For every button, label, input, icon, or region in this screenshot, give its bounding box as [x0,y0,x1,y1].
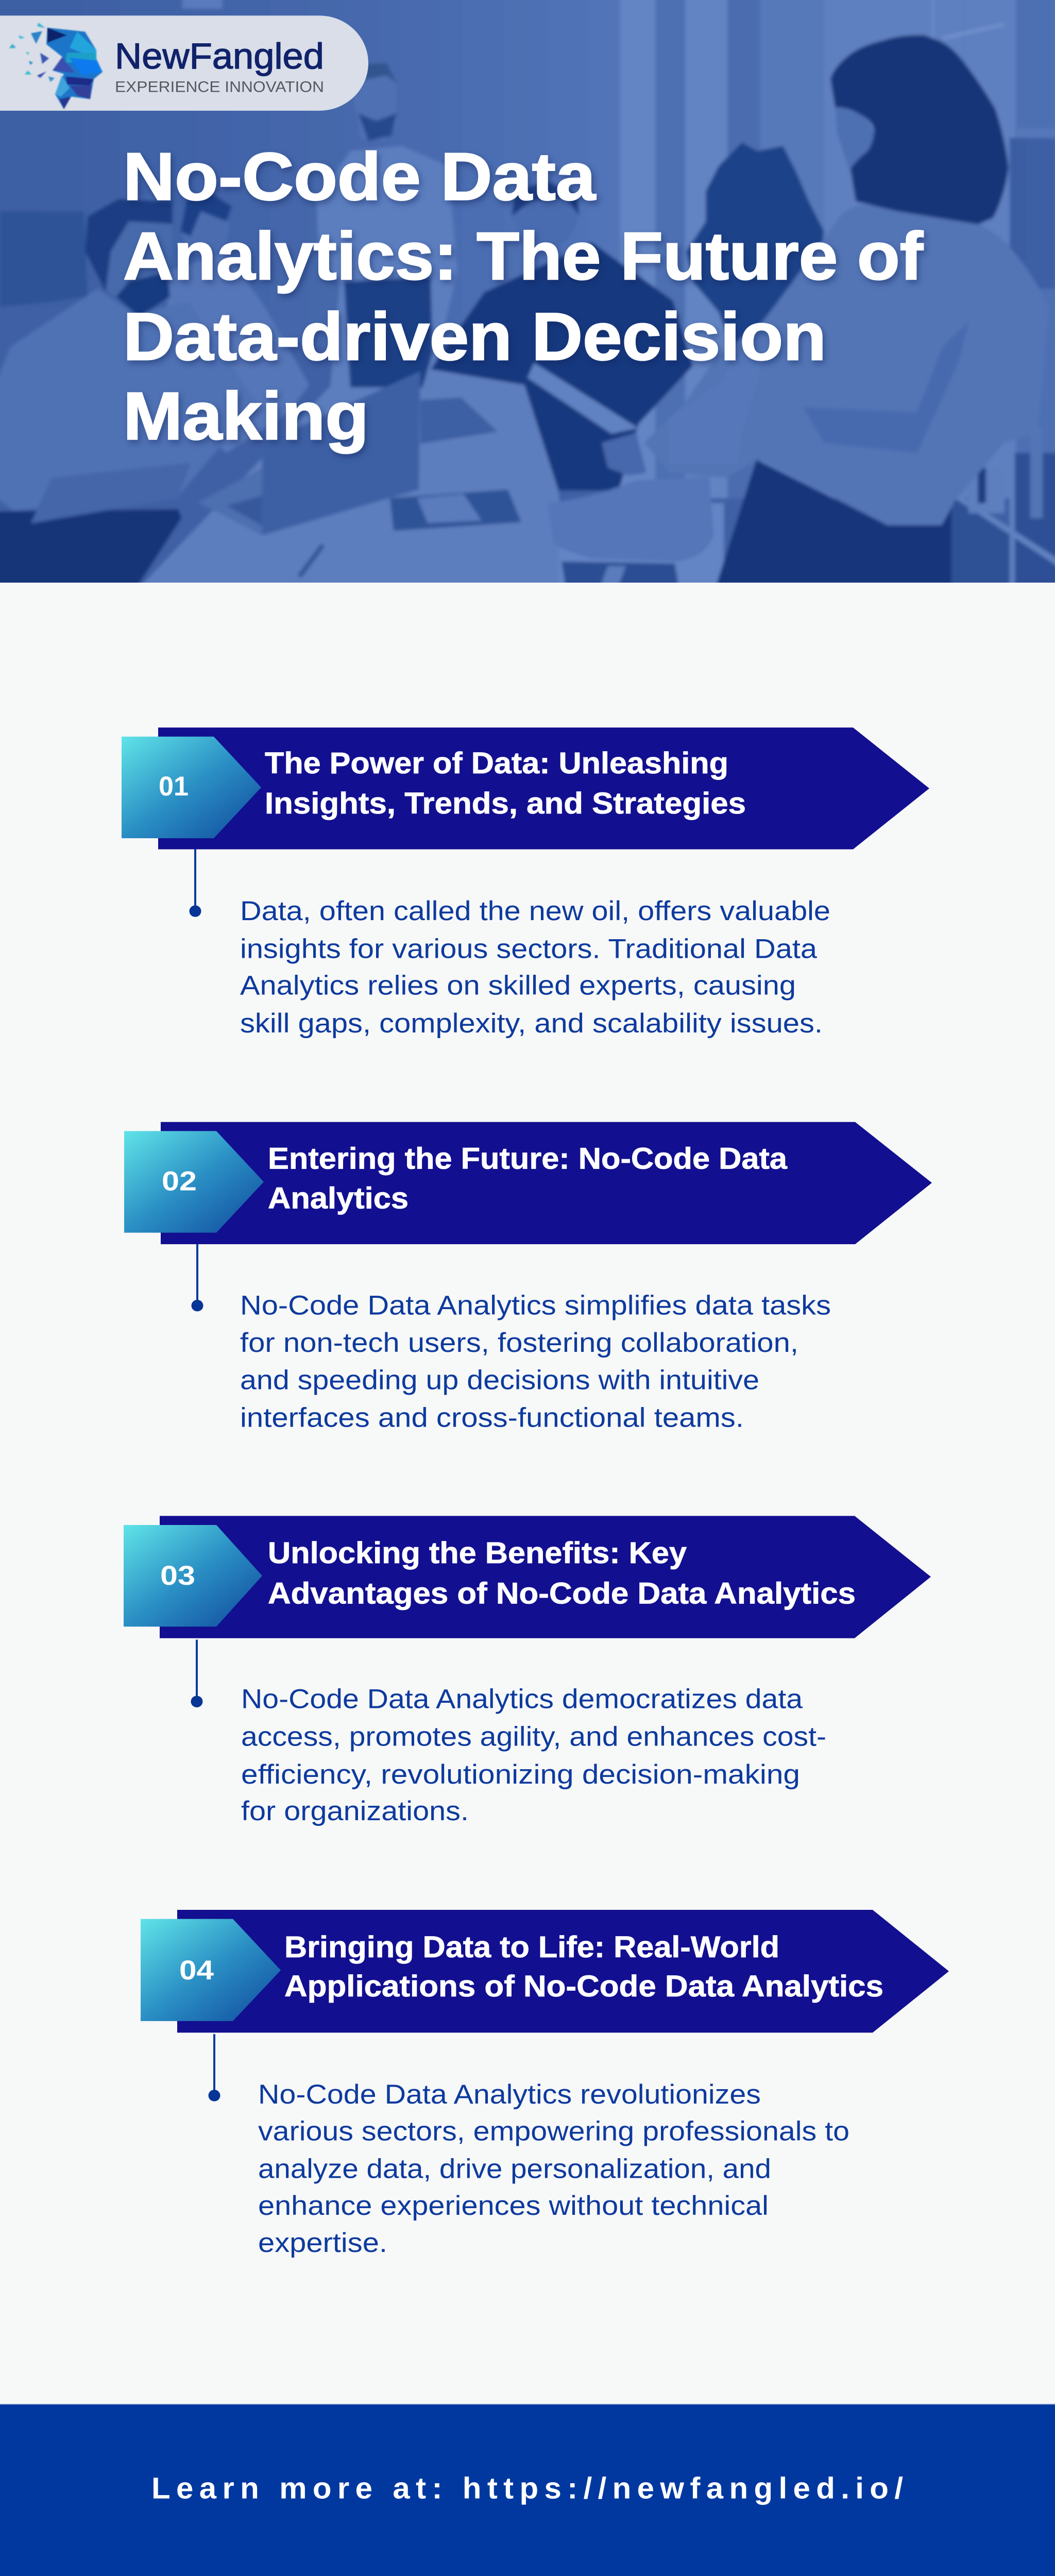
logo wordmark: NewFangled [115,37,324,77]
woman pants [713,460,951,594]
number badge 03 [124,1525,262,1626]
body text 03: No-Code Data Analytics democratizes data [241,1684,803,1714]
body text 02: and speeding up decisions with intuitive [240,1365,759,1395]
heading 04 [284,1929,883,2003]
number 02: 02 [162,1166,197,1196]
shelf [951,496,1055,594]
heading 01 [265,746,746,820]
body text 01: insights for various sectors. Traditional Data [240,934,817,964]
logo pill background [0,15,368,111]
connector 03 [191,1640,203,1707]
laptop [262,371,420,535]
number badge 01 [122,737,261,838]
banner arrow 01 [158,727,929,849]
body text 03 [241,1684,826,1826]
woman behind [165,251,309,453]
body text 02: No-Code Data Analytics simplifies data tasks [240,1291,831,1321]
banner arrow 04 [177,1910,949,2032]
number 03: 03 [160,1561,195,1591]
number badge 04 [141,1919,281,2021]
body text 02: interfaces and cross-functional teams. [240,1403,744,1433]
standing man [316,146,457,393]
body text 01: skill gaps, complexity, and scalability issues. [240,1008,823,1039]
logo tagline: EXPERIENCE INNOVATION [115,79,324,96]
heading 01: Insights, Trends, and Strategies [265,786,746,820]
panel: section 01 [122,727,929,1039]
woman hair [830,35,1009,225]
heading 02: Entering the Future: No-Code Data [268,1141,788,1175]
paper [528,363,638,434]
connector 01 [190,849,201,917]
panel: section 03 [124,1516,931,1826]
body text 04: expertise. [258,2228,387,2258]
woman shirt [644,205,1049,526]
title: No-Code Data [123,139,596,214]
left man shirt [0,290,218,511]
body text 01: Analytics relies on skilled experts, causing [240,971,796,1001]
logo badge [0,15,368,111]
heading 03 [268,1536,856,1610]
banner arrow 02 [161,1122,932,1244]
heading 02: Analytics [268,1181,409,1215]
heading 01: The Power of Data: Unleashing [265,746,728,780]
body text 04: various sectors, empowering professionals to [258,2116,849,2146]
number badge 02 [124,1131,264,1233]
second laptop [420,397,498,444]
title [123,139,924,454]
connector 04 [208,2034,220,2102]
title: Making [123,379,369,454]
number 04: 04 [179,1955,214,1986]
number 01: 01 [159,772,189,802]
pen [299,545,323,577]
body text 04 [258,2080,849,2258]
body text 03: access, promotes agility, and enhances cost- [241,1722,826,1752]
seated man dark sweater [431,243,693,490]
connector 02 [192,1244,203,1311]
title: Analytics: The Future of [123,218,924,294]
left man trousers [0,508,182,583]
footer link text: Learn more at: https://newfangled.io/ [151,2471,903,2505]
heading 04: Applications of No-Code Data Analytics [284,1969,883,2003]
banner arrow 03 [160,1516,931,1638]
heading 03: Unlocking the Benefits: Key [268,1536,687,1570]
hero photo: office team meeting in blue duotone [0,0,1055,594]
footer band [0,2403,1055,2576]
table [143,369,560,583]
icon: polygon head logo [9,23,103,109]
body text 04: analyze data, drive personalization, and [258,2154,771,2184]
body text 01 [240,896,830,1039]
sofa [0,211,88,307]
plant [686,142,824,347]
woman face [835,107,876,174]
body text 02: for non-tech users, fostering collaboration, [240,1328,798,1358]
heading 02 [268,1141,788,1215]
heading 03: Advantages of No-Code Data Analytics [268,1576,856,1610]
body text 03: for organizations. [241,1797,469,1826]
title: Data-driven Decision [123,299,826,375]
hand [602,433,646,476]
panel: section 02 [124,1122,932,1433]
chair [548,477,714,562]
body text 04: enhance experiences without technical [258,2191,769,2221]
heading 04: Bringing Data to Life: Real-World [284,1929,779,1964]
body text 04: No-Code Data Analytics revolutionizes [258,2080,761,2110]
panel: section 04 [141,1910,949,2258]
body text 03: efficiency, revolutionizing decision-making [241,1759,800,1790]
body text 01: Data, often called the new oil, offers valuable [240,896,830,926]
lamp [182,0,223,9]
body text 02 [240,1291,831,1433]
tablet [390,489,521,531]
